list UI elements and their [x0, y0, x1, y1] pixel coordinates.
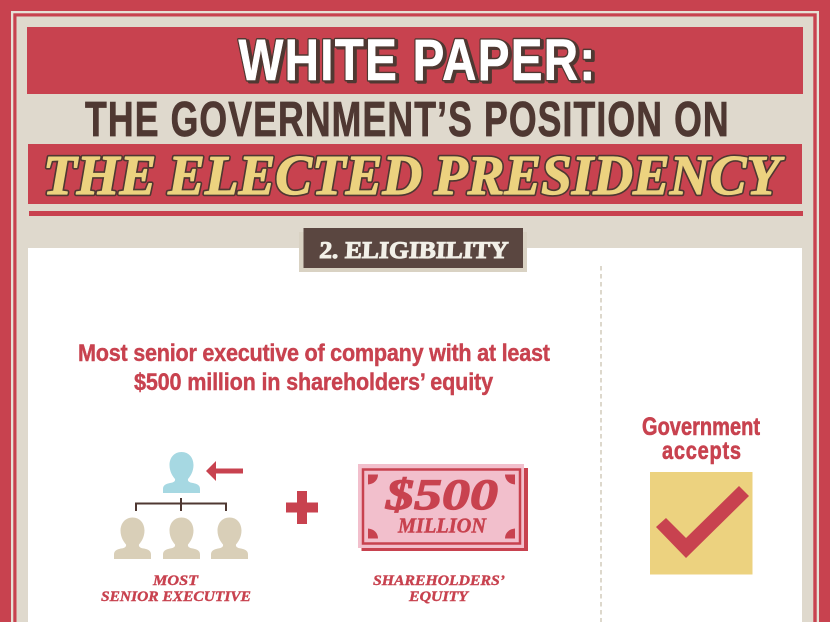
icon: banknote: MILLION	[397, 514, 487, 538]
note corners	[368, 474, 515, 538]
icon: banknote: $500	[385, 472, 498, 519]
icon: check box	[650, 472, 752, 574]
title banner: the elected presidency: THE ELECTED PRESIDENCY	[43, 145, 785, 207]
section tab: eligibility	[299, 228, 527, 272]
government response heading	[642, 413, 760, 465]
label: shareholders' equity: SHAREHOLDERS’	[373, 573, 505, 589]
title banner: white paper: WHITE PAPER:	[238, 29, 595, 93]
section tab: eligibility: 2. ELIGIBILITY	[319, 238, 509, 264]
government response heading: accepts	[662, 437, 741, 465]
label: most senior executive: SENIOR EXECUTIVE	[101, 589, 251, 605]
title banner: white paper	[27, 27, 803, 95]
government response heading: Government	[642, 413, 760, 441]
icon: top executive	[163, 452, 200, 493]
label: shareholders' equity: EQUITY	[408, 589, 470, 605]
label: most senior executive: MOST	[152, 573, 199, 589]
content panel	[28, 248, 802, 622]
label: shareholders' equity	[373, 573, 505, 605]
title banner: white paper: WHITE PAPER:	[238, 29, 595, 93]
icon: staff	[114, 518, 248, 559]
criterion heading: Most senior executive of company with at least	[78, 339, 550, 366]
icon: red arrow	[206, 461, 243, 481]
criterion heading	[78, 339, 550, 395]
header rule	[29, 211, 803, 216]
subtitle: THE GOVERNMENT’S POSITION ON	[85, 92, 729, 147]
column divider	[600, 266, 602, 622]
chart connector	[136, 498, 226, 511]
title banner: white paper: WHITE PAPER:	[241, 30, 598, 95]
icon: org chart	[114, 452, 248, 559]
criterion heading: $500 million in shareholders’ equity	[134, 368, 493, 395]
title banner: the elected presidency: THE ELECTED PRESIDENCY	[43, 145, 785, 207]
label: most senior executive	[101, 573, 251, 605]
icon: banknote	[358, 464, 528, 551]
icon: plus	[286, 491, 318, 524]
